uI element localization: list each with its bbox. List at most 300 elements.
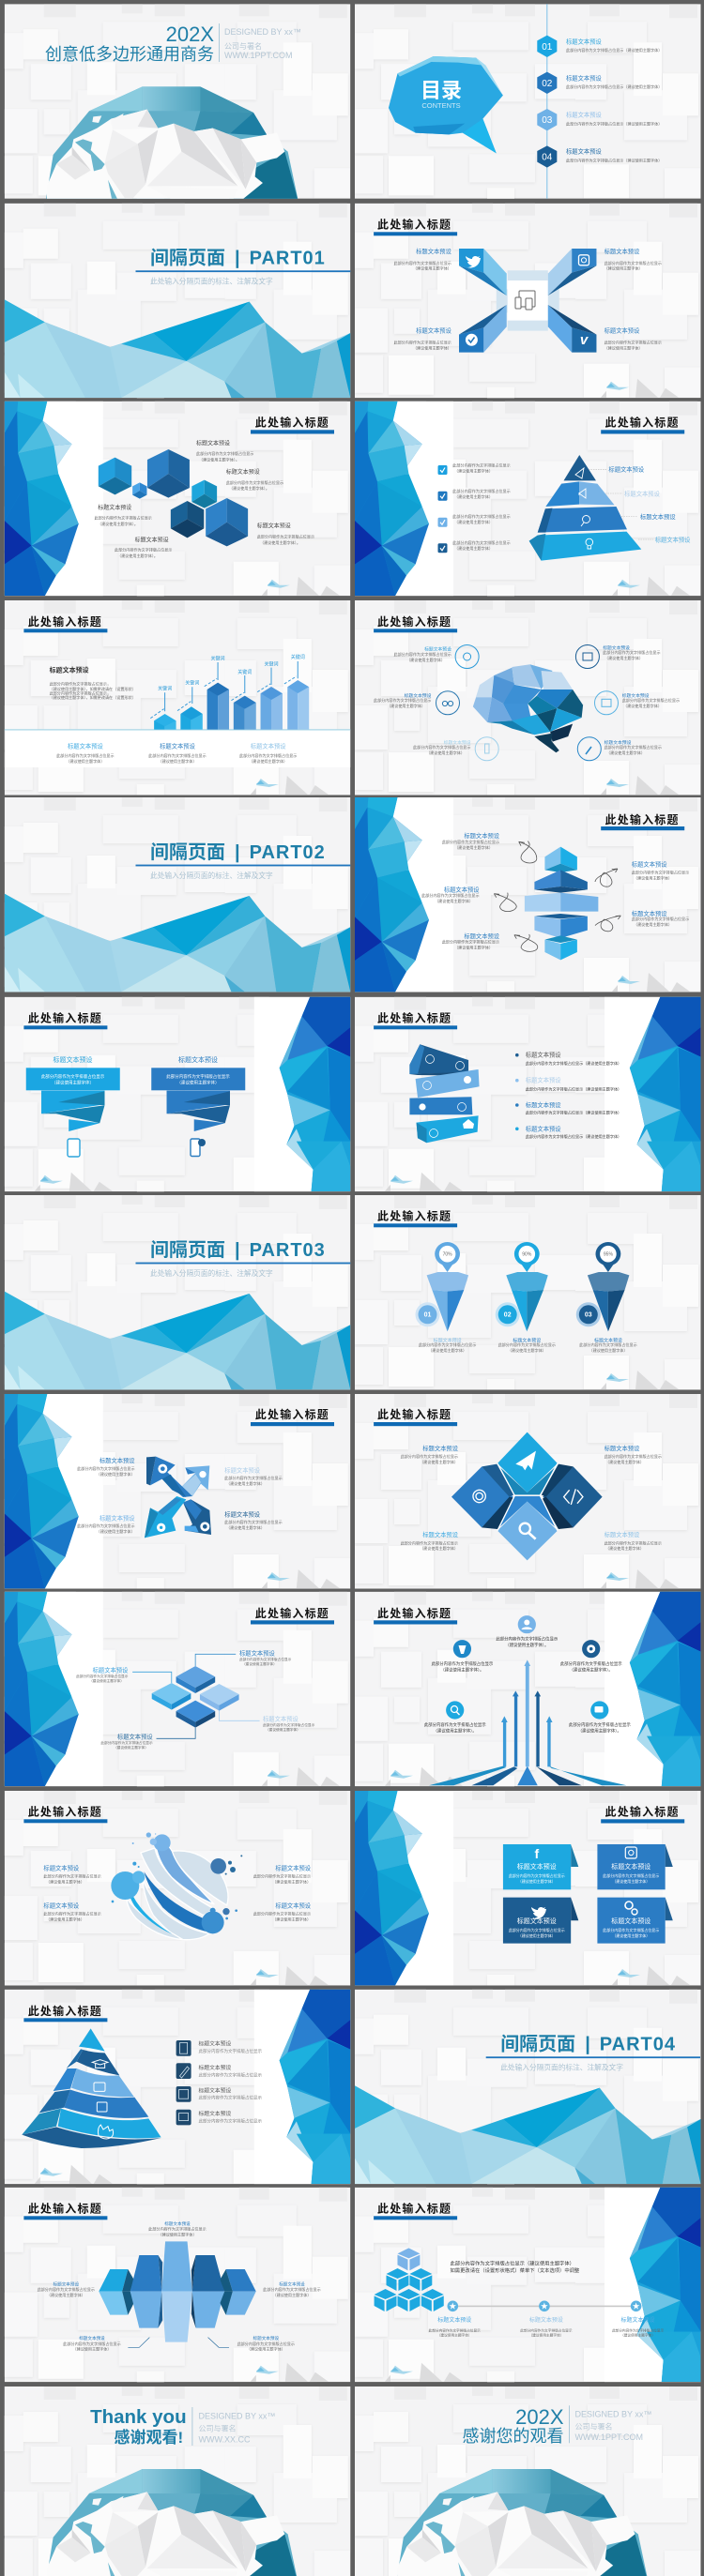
diamond captions: （建议使用主题字体）: [605, 1459, 644, 1464]
number circles: 02: [504, 1312, 512, 1319]
tile captions: 此部分内容作为文字排版占位显示: [100, 1740, 153, 1745]
slide: isometric tiles: [5, 1592, 350, 1787]
slide: cover: [5, 4, 350, 204]
check list: [437, 462, 511, 553]
part 03 heading: 间隔页面: [150, 1239, 225, 1261]
cover title: 202X: [166, 23, 214, 46]
slide: closing: [355, 2387, 700, 2576]
tile captions: 此部分内容作为文字排版占位显示: [263, 1722, 315, 1727]
block captions: 此部分内容作为文字排版占位显示: [632, 916, 689, 921]
captions: 此部分内容作为文字排版占位显示: [226, 479, 283, 485]
speech bubble: 目录: [421, 79, 462, 102]
card text and icons: f: [534, 1846, 539, 1861]
arrow captions: （建议使用主题字体）。: [578, 1728, 621, 1734]
part 02 heading: PART02: [250, 842, 326, 863]
tile captions: [76, 1648, 315, 1750]
captions: （建议使用主题字体）。: [260, 539, 300, 545]
block captions: 标题文本预设: [632, 859, 667, 868]
arrow captions: 标题文本预设: [224, 1465, 261, 1474]
arrow captions: 标题文本预设: [224, 1509, 261, 1518]
brain captions: 此部分内容作为文字排版占位显示: [413, 744, 471, 750]
box captions: 此部分内容作为文字排版占位显示（建议使用主题字体）: [526, 1133, 621, 1139]
bottom captions: 标题文本预设: [251, 741, 286, 750]
captions: 此部分内容作为文字排版占位显示: [94, 514, 152, 520]
pyramid labels: [608, 464, 691, 544]
diamond captions: 此部分内容作为文字排版占位显示: [401, 1540, 458, 1546]
arm captions: 此部分内容作为文字排版占位显示: [393, 340, 451, 345]
block captions: 标题文本预设: [464, 932, 500, 940]
low-poly brain: [473, 664, 583, 752]
timeline: 此部分内容作为文字排版占位显示: [520, 2328, 573, 2333]
planet illustration: [111, 1832, 242, 1940]
brain captions: 标题文本预设: [605, 739, 632, 746]
heading: [251, 1606, 334, 1625]
bar keywords: 关键词: [158, 686, 172, 692]
planet captions: （建议使用主题字体）: [272, 1916, 311, 1921]
arrow captions: （建议使用主题字体）: [97, 1471, 135, 1477]
ribbon titles: 标题文本预设: [178, 1055, 218, 1064]
heading: [23, 1011, 107, 1029]
number circles: [415, 1302, 601, 1326]
arrow captions: （建议使用主题字体）: [97, 1528, 135, 1534]
block captions: （建议使用主题字体）: [435, 898, 473, 903]
brain captions: 标题文本预设: [603, 644, 630, 651]
block captions: [421, 831, 689, 949]
heading: 此处输入标题: [377, 614, 451, 629]
speech bubble: CONTENTS: [421, 101, 461, 110]
brain captions: 此部分内容作为文字排版占位显示: [622, 697, 680, 703]
tile captions: （建议使用主题字体）: [266, 1727, 300, 1732]
chart description: （建议使用主题字体），如需更改请在（设置形状）: [50, 686, 136, 691]
block captions: （建议使用主题字体）: [634, 921, 672, 927]
part 04 heading: 间隔页面: [500, 2034, 575, 2055]
slide: part 04: [355, 1990, 700, 2185]
planet captions: 标题文本预设: [275, 1902, 312, 1910]
arm captions: （建议使用主题字体）: [413, 265, 451, 270]
tile captions: 标题文本预设: [263, 1715, 298, 1723]
block captions: 此部分内容作为文字排版占位显示: [442, 938, 499, 944]
cone captions: 标题文本预设: [199, 2064, 231, 2071]
timeline line: [546, 4, 547, 199]
arrow captions: 标题文本预设: [99, 1456, 135, 1464]
heading: [23, 2004, 107, 2022]
cover title: [45, 23, 301, 64]
slide: social cards: [355, 1791, 700, 1986]
arm captions: [393, 247, 662, 351]
columns: [99, 2241, 256, 2347]
ribbon titles: 标题文本预设: [53, 1055, 92, 1064]
contents text: 此部分内容作为文字排版占位显示（建议使用主题字体）: [566, 83, 662, 89]
arm captions: 标题文本预设: [416, 326, 452, 335]
heading: 此处输入标题: [605, 415, 680, 430]
pyramid connectors: [589, 469, 653, 539]
check list: （建议使用主题字体）: [454, 519, 493, 524]
thank you title: [90, 2406, 275, 2447]
diamond captions: [401, 1444, 662, 1551]
captions: 标题文本预设: [257, 523, 291, 530]
arm captions: 标题文本预设: [416, 247, 452, 255]
ribbon 1: 此部分内容作为文字排版占位显示: [41, 1073, 105, 1080]
slide: stacked 3D blocks: [355, 797, 700, 993]
box captions: 标题文本预设: [526, 1100, 561, 1109]
slide: growth bars: [5, 600, 350, 796]
cone captions: 此部分内容作为文字排版占位显示: [199, 2095, 262, 2101]
arm captions: （建议使用主题字体）: [413, 345, 451, 351]
bottom captions: 标题文本预设: [68, 741, 103, 750]
part 03 heading: |: [235, 1240, 240, 1261]
column captions: （建议使用主题字体）: [247, 2345, 285, 2351]
card text and icons: （建议使用主题字体）: [518, 1878, 556, 1884]
column captions: （建议使用主题字体）: [159, 2231, 196, 2236]
contents text: 此部分内容作为文字排版占位显示（建议使用主题字体）: [566, 158, 662, 163]
box captions: 此部分内容作为文字排版占位显示（建议使用主题字体）: [526, 1086, 621, 1092]
arrow captions: （建议使用主题字体）。: [440, 1666, 483, 1674]
slide: symmetric columns: [5, 2188, 350, 2383]
cone captions: [419, 1338, 637, 1353]
percentage pins: [435, 1242, 620, 1265]
arrow captions: 此部分内容作为文字排版占位显示: [431, 1660, 494, 1667]
check list: 此部分内容作为文字排版占位显示: [452, 488, 511, 493]
brain captions: （建议使用主题字体）: [426, 750, 465, 755]
slide: crossed arrows: [5, 1394, 350, 1589]
cone captions: 标题文本预设: [594, 1338, 622, 1343]
block captions: 标题文本预设: [464, 831, 500, 840]
arrow captions: 此部分内容作为文字排版占位显示: [496, 1636, 559, 1642]
cubes: [99, 449, 248, 546]
planet captions: 此部分内容作为文字排版占位显示: [253, 1872, 311, 1878]
arrow captions: 此部分内容作为文字排版占位显示: [224, 1475, 283, 1480]
diamond captions: 标题文本预设: [422, 1530, 459, 1538]
captions: （建议使用主题字体）。: [199, 456, 239, 462]
captions: 标题文本预设: [135, 536, 169, 543]
slide: curved cone: [5, 1990, 350, 2185]
column captions: 此部分内容作为文字排版占位显示: [237, 2341, 295, 2346]
box captions: [515, 1051, 621, 1139]
part 04 heading: PART04: [600, 2035, 676, 2055]
closing title: WWW.1PPT.COM: [574, 2432, 643, 2442]
ribbon 2: 此部分内容作为文字排版占位显示: [166, 1073, 230, 1080]
cones: [427, 1254, 629, 1331]
bar keywords: 关键词: [237, 669, 252, 675]
cone captions: 标题文本预设: [513, 1338, 541, 1343]
part 04 heading: 此处输入分隔页面的标注、注解及文字: [500, 2063, 623, 2072]
brain captions: （建议使用主题字体）: [387, 703, 425, 708]
part 04 heading: |: [585, 2035, 590, 2055]
timeline: （建议使用主题字体）: [437, 2333, 472, 2338]
ribbon 1: （建议使用主题字体）: [52, 1079, 94, 1086]
tile captions: 标题文本预设: [117, 1732, 153, 1740]
check list: （建议使用主题字体）: [454, 545, 493, 551]
slide: ribbons: [5, 997, 350, 1192]
percentage pins: 70%: [443, 1251, 452, 1257]
heading: [374, 1011, 457, 1029]
column captions: 标题文本预设: [253, 2335, 279, 2341]
timeline: （建议使用主题字体）: [528, 2333, 563, 2338]
pyramid labels: 标题文本预设: [640, 512, 676, 521]
column captions: 此部分内容作为文字排版占位显示: [148, 2225, 207, 2231]
ribbon 1: [26, 1068, 120, 1131]
tiles and connectors: [132, 1654, 260, 1738]
cone captions: 标题文本预设: [199, 2110, 231, 2117]
planet captions: 标题文本预设: [43, 1902, 80, 1910]
captions: （建议使用主题字体）。: [229, 485, 269, 491]
block captions: （建议使用主题字体）: [454, 844, 493, 850]
diamond captions: 此部分内容作为文字排版占位显示: [605, 1540, 662, 1546]
heading: 此处输入标题: [377, 1606, 451, 1620]
numbered hexagons: 02: [542, 79, 553, 89]
timeline: 标题文本预设: [529, 2316, 563, 2324]
timeline: ★: [541, 2302, 548, 2311]
card text and icons: 标题文本预设: [517, 1917, 557, 1925]
timeline: ★: [449, 2302, 456, 2311]
chart description: [50, 666, 136, 700]
description: 如需更改请在（设置形状格式）菜单下（文本选项）中调整: [451, 2266, 580, 2274]
arm captions: （建议使用主题字体）: [605, 345, 643, 351]
part 02 heading: 此处输入分隔页面的标注、注解及文字: [150, 871, 273, 880]
card text and icons: （建议使用主题字体）: [612, 1932, 650, 1938]
arrow captions: 此部分内容作为文字排版占位显示: [77, 1465, 135, 1471]
percentage pins: 90%: [522, 1251, 532, 1257]
block captions: （建议使用主题字体）: [634, 874, 672, 880]
tile captions: （建议使用主题字体）: [242, 1661, 277, 1666]
arm captions: （建议使用主题字体）: [605, 265, 643, 270]
heading: 此处输入标题: [255, 1606, 329, 1620]
closing title: 公司与署名: [574, 2421, 612, 2431]
cross diagram: v: [580, 332, 589, 348]
diamond captions: 此部分内容作为文字排版占位显示: [605, 1453, 662, 1459]
heading: [23, 614, 107, 632]
slide: rising arrows: [355, 1592, 700, 1787]
cone captions: （建议使用主题字体）: [589, 1347, 627, 1353]
slide: four social arms: [355, 204, 700, 399]
captions: 此部分内容作为文字排版占位显示: [257, 533, 314, 538]
part 02 heading: |: [235, 842, 240, 863]
arm captions: 标题文本预设: [605, 326, 640, 335]
box captions: 此部分内容作为文字排版占位显示（建议使用主题字体）: [526, 1060, 621, 1066]
slide: cube stack timeline: [355, 2188, 700, 2383]
diamond captions: 标题文本预设: [605, 1444, 640, 1452]
heading: 此处输入标题: [28, 1011, 102, 1024]
heading: 此处输入标题: [377, 218, 451, 231]
baseline: [5, 729, 350, 730]
cover title: WWW.1PPT.COM: [224, 51, 293, 60]
heading: 此处输入标题: [377, 2201, 451, 2216]
cover title: DESIGNED BY xx™: [224, 27, 301, 37]
brain captions: 此部分内容作为文字排版占位显示: [393, 651, 451, 657]
heading: [251, 1407, 334, 1426]
check list: 此部分内容作为文字排版占位显示: [452, 539, 511, 545]
pyramid labels: 标题文本预设: [624, 490, 661, 498]
contents text: 标题文本预设: [566, 111, 602, 119]
part 03 heading: 此处输入分隔页面的标注、注解及文字: [150, 1268, 273, 1278]
ribbon titles: [53, 1055, 218, 1064]
arrow captions: （建议使用主题字体）: [226, 1480, 265, 1486]
column captions: （建议使用主题字体）: [47, 2292, 85, 2297]
slide: part 02: [5, 797, 350, 993]
heading: [601, 1805, 684, 1824]
heading: [601, 415, 684, 433]
block captions: 标题文本预设: [632, 909, 667, 917]
diamond cluster: [451, 1432, 603, 1560]
percentage pins: 95%: [604, 1251, 613, 1257]
arrow captions: （建议使用主题字体）。: [505, 1642, 548, 1648]
closing title: 202X: [515, 2405, 564, 2429]
heading: 此处输入标题: [28, 614, 102, 629]
ribbon 2: [151, 1068, 245, 1131]
planet captions: 标题文本预设: [43, 1864, 80, 1872]
column captions: [38, 2220, 321, 2351]
cards: [503, 1844, 673, 1944]
cube stack: [375, 2248, 444, 2311]
part 01 heading: 此处输入分隔页面的标注、注解及文字: [150, 277, 273, 286]
heading: 此处输入标题: [377, 1208, 451, 1223]
column captions: 标题文本预设: [164, 2220, 191, 2227]
brain captions: 标题文本预设: [444, 739, 471, 746]
heading: [374, 1407, 457, 1426]
contents text: 此部分内容作为文字排版占位显示（建议使用主题字体）: [566, 120, 662, 126]
part 03 heading: [135, 1239, 350, 1278]
arm captions: 此部分内容作为文字排版占位显示: [393, 260, 451, 265]
card text and icons: 此部分内容作为文字排版占位显示: [509, 1872, 565, 1878]
cone captions: 标题文本预设: [199, 2039, 231, 2047]
heading: 此处输入标题: [605, 812, 680, 826]
column captions: 标题文本预设: [54, 2281, 79, 2287]
tile captions: 此部分内容作为文字排版占位显示: [76, 1674, 129, 1678]
slide: brain: [355, 600, 700, 796]
thank you title: Thank you: [90, 2406, 187, 2428]
arrow captions: [77, 1456, 283, 1534]
timeline: [429, 2300, 664, 2338]
diamond captions: 此部分内容作为文字排版占位显示: [401, 1453, 458, 1459]
slide: part 03: [5, 1195, 350, 1390]
boxes: [409, 1044, 480, 1143]
column captions: （建议使用主题字体）: [73, 2345, 111, 2351]
contents text: 标题文本预设: [566, 147, 602, 156]
bottom captions: 此部分内容作为文字排版占位显示: [148, 752, 207, 758]
check list: 此部分内容作为文字排版占位显示: [452, 462, 511, 467]
check list: （建议使用主题字体）: [454, 493, 493, 499]
bar keywords: 关键词: [185, 680, 199, 687]
pyramid chart: [529, 455, 641, 561]
brain captions: 标题文本预设: [424, 645, 451, 653]
arrow captions: 此部分内容作为文字排版占位显示: [424, 1721, 486, 1728]
box captions: 标题文本预设: [526, 1076, 561, 1084]
slide: part 01: [5, 204, 350, 399]
arrow captions: 此部分内容作为文字排版占位显示: [77, 1523, 135, 1528]
timeline: 标题文本预设: [620, 2316, 655, 2324]
box captions: 标题文本预设: [526, 1051, 561, 1059]
part 01 heading: 间隔页面: [150, 248, 225, 269]
heading: [251, 415, 334, 433]
brain captions: 标题文本预设: [622, 692, 650, 699]
arm captions: 此部分内容作为文字排版占位显示: [605, 340, 662, 345]
chart description: 此部分内容作为文字排版占位显示，: [50, 690, 111, 696]
captions: 标题文本预设: [226, 468, 260, 476]
heading: 此处输入标题: [255, 1407, 329, 1421]
cone captions: 此部分内容作为文字排版占位显示: [498, 1341, 556, 1347]
ribbon 2: （建议使用主题字体）: [176, 1079, 220, 1086]
planet captions: （建议使用主题字体）: [46, 1878, 84, 1884]
bottom captions: 此部分内容作为文字排版占位显示: [56, 752, 115, 758]
brain captions: （建议使用主题字体）: [623, 703, 662, 708]
bottom captions: （建议使用主题字体）: [66, 758, 104, 764]
tile captions: 标题文本预设: [93, 1666, 129, 1674]
cone captions: 此部分内容作为文字排版占位显示: [579, 1341, 637, 1347]
planet captions: 此部分内容作为文字排版占位显示: [43, 1872, 101, 1878]
numbered hexagons: 04: [542, 152, 553, 163]
diamond captions: 标题文本预设: [422, 1444, 459, 1452]
card text and icons: （建议使用主题字体）: [518, 1932, 556, 1938]
cone captions: 此部分内容作为文字排版占位显示: [419, 1341, 476, 1347]
diamond captions: 标题文本预设: [605, 1530, 640, 1538]
part 01 heading: |: [235, 249, 240, 269]
column captions: 标题文本预设: [279, 2281, 305, 2287]
arrows: [145, 1457, 211, 1538]
brain captions: 此部分内容作为文字排版占位显示: [603, 649, 661, 655]
timeline: 此部分内容作为文字排版占位显示: [612, 2328, 664, 2333]
bar keywords: 关键词: [264, 660, 279, 667]
thank you title: 感谢观看!: [115, 2428, 183, 2447]
part 04 heading: [486, 2034, 700, 2072]
bar keywords: 关键词: [291, 654, 305, 660]
cone captions: 此部分内容作为文字排版占位显示: [199, 2048, 262, 2054]
arrow captions: （建议使用主题字体）。: [434, 1728, 477, 1734]
brain captions: （建议使用主题字体）: [406, 657, 445, 662]
planet captions: 此部分内容作为文字排版占位显示: [43, 1910, 101, 1916]
card text and icons: 标题文本预设: [611, 1862, 650, 1871]
arrows chart: [429, 1659, 627, 1785]
column captions: 此部分内容作为文字排版占位显示: [63, 2341, 121, 2346]
slide: hexagon cubes: [5, 402, 350, 597]
planet captions: （建议使用主题字体）: [272, 1878, 311, 1884]
column captions: 此部分内容作为文字排版占位显示: [263, 2286, 321, 2292]
planet captions: （建议使用主题字体）: [46, 1916, 84, 1921]
tile captions: （建议使用主题字体）: [89, 1678, 124, 1683]
timeline: （建议使用主题字体）: [620, 2333, 655, 2338]
heading: 此处输入标题: [28, 2201, 102, 2216]
tile captions: 此部分内容作为文字排版占位显示: [239, 1657, 292, 1661]
arm captions: 此部分内容作为文字排版占位显示: [605, 260, 662, 265]
part 03 heading: PART03: [250, 1240, 326, 1261]
block captions: 标题文本预设: [444, 886, 480, 894]
diamond captions: （建议使用主题字体）: [420, 1459, 458, 1464]
block captions: 此部分内容作为文字排版占位显示: [442, 839, 499, 844]
part 01 heading: PART01: [250, 249, 326, 269]
cone captions: （建议使用主题字体）: [508, 1347, 546, 1353]
diamond captions: （建议使用主题字体）: [420, 1545, 458, 1551]
arrow captions: （建议使用主题字体）。: [570, 1666, 613, 1674]
block captions: （建议使用主题字体）: [454, 944, 493, 949]
thank you title: WWW.XX.CC: [199, 2434, 251, 2444]
cone captions: 标题文本预设: [199, 2086, 231, 2094]
cone chart: [22, 2028, 161, 2148]
column captions: 此部分内容作为文字排版占位显示: [38, 2286, 95, 2292]
bottom captions: 此部分内容作为文字排版占位显示: [239, 752, 297, 758]
heading: [601, 812, 684, 830]
column captions: （建议使用主题字体）: [273, 2292, 311, 2297]
arm captions: 标题文本预设: [605, 247, 640, 255]
arrow captions: [424, 1636, 631, 1734]
icon tiles: [176, 2040, 191, 2125]
brain captions: 此部分内容作为文字排版占位显示: [374, 697, 431, 703]
brain captions: 此部分内容作为文字排版占位显示: [605, 744, 662, 750]
bar keywords: [158, 654, 305, 692]
numbered hexagons: [537, 36, 557, 168]
bar chart: [150, 661, 309, 730]
check list: 此部分内容作为文字排版占位显示: [452, 513, 511, 519]
planet captions: 标题文本预设: [275, 1864, 312, 1872]
cone captions: 此部分内容作为文字排版占位显示: [199, 2071, 262, 2078]
